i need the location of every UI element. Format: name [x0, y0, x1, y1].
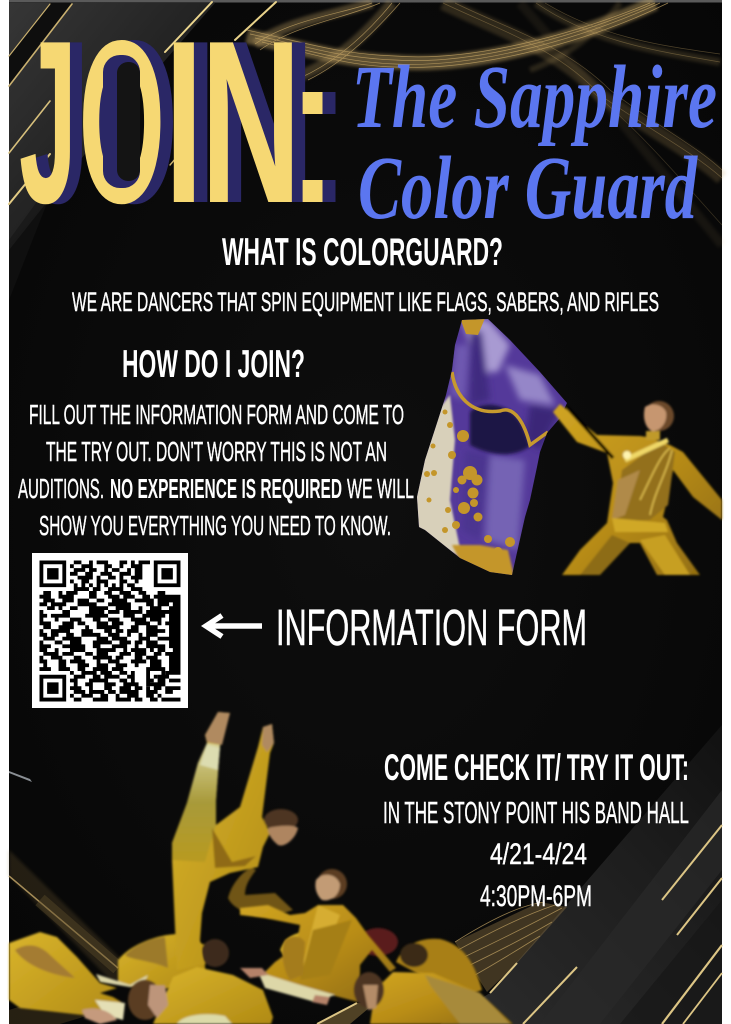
text block: how to join	[18, 399, 414, 541]
photo: standing dancer	[172, 712, 298, 970]
text block: how to join: WE WILL	[347, 473, 414, 504]
photo: front floor dancers	[128, 967, 513, 1024]
title: The Sapphire Color Guard	[352, 48, 717, 238]
gold mesh, lower left	[9, 850, 130, 1024]
heading: how do i join: HOW DO I JOIN?	[122, 343, 305, 386]
small stage light	[9, 771, 32, 782]
photo: flag	[410, 318, 567, 580]
arrow	[206, 616, 262, 636]
text block: how to join: AUDITIONS.	[18, 473, 104, 504]
text block: how to join: FILL OUT THE INFORMATION FORM AND COME TO	[29, 399, 404, 430]
top-left gold lines	[9, 2, 276, 204]
text: times: 4:30PM-6PM	[480, 880, 592, 913]
QR code	[32, 553, 188, 708]
text: dates: 4/21-4/24	[490, 838, 587, 871]
O counter	[103, 55, 140, 188]
heading: what is colorguard: WHAT IS COLORGUARD?	[222, 231, 503, 274]
title: JOIN	[20, 40, 322, 204]
gold silk waves, top right	[247, 3, 722, 245]
gold mesh, lower centre	[317, 902, 567, 1024]
photo: seated dancer	[240, 869, 396, 1005]
gold lines, lower right	[523, 825, 722, 1024]
top-left gray diagonal panel	[9, 3, 215, 300]
title: JOIN: J	[19, 0, 77, 252]
title: JOIN shadow: J	[31, 0, 89, 252]
text block: how to join: SHOW YOU EVERYTHING YOU NEED TO KNOW.	[39, 510, 391, 541]
title: JOIN shadow	[36, 40, 336, 204]
photo: floor dancers, back row	[96, 928, 482, 995]
text block: how to join: NO EXPERIENCE IS REQUIRED	[110, 473, 342, 504]
photo: flag dancer	[553, 401, 722, 575]
photo: left floor dancer	[9, 932, 125, 1024]
text block: how to join: THE TRY OUT. DON'T WORRY THIS IS NOT AN	[46, 436, 387, 467]
bottom-right gray panels	[440, 725, 722, 1024]
